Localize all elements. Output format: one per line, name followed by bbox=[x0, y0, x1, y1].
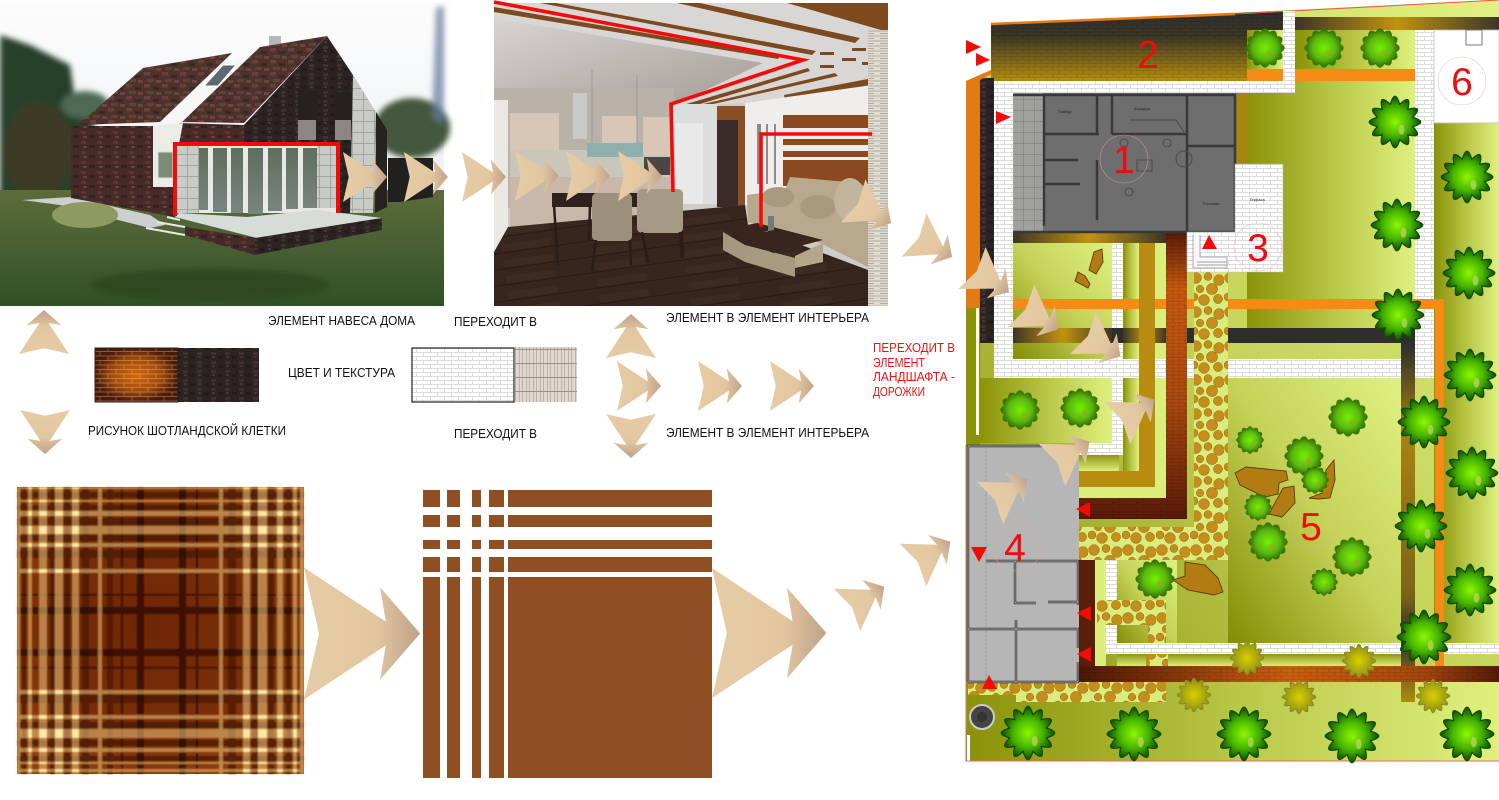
swatch: dark brick bbox=[178, 348, 259, 402]
pebble paths bbox=[968, 272, 1228, 702]
swatch: orange brick bbox=[95, 348, 178, 402]
zone numbers: 6 bbox=[1451, 61, 1473, 104]
large arrow: tartan to simplified stripes bbox=[304, 568, 420, 700]
path and shrub bbox=[22, 197, 165, 228]
white volume and window bbox=[153, 123, 183, 187]
trees behind the house bbox=[0, 6, 450, 260]
white paving paths bbox=[994, 11, 1499, 654]
red label: becomes landscape paths: ЛАНДШАФТА - bbox=[873, 369, 955, 384]
legend down arrow bbox=[20, 410, 70, 454]
timber beams bbox=[494, 3, 888, 107]
label: tartan pattern: РИСУНОК ШОТЛАНДСКОЙ КЛЕТКИ bbox=[88, 423, 286, 438]
ceiling bbox=[494, 18, 763, 104]
label: transforms into, top: ПЕРЕХОДИТ В bbox=[454, 314, 537, 329]
zone numbers: 3 bbox=[1247, 227, 1269, 270]
room labels: Гостиная bbox=[1203, 201, 1219, 206]
kitchen wall bbox=[494, 88, 674, 208]
dark red strip beside outbuilding bbox=[1079, 560, 1095, 666]
swatch: pale stone bbox=[515, 347, 577, 402]
dining table and chairs bbox=[552, 189, 683, 270]
outbuilding 4 bbox=[968, 445, 1079, 682]
dormer strip and skylight bbox=[160, 50, 253, 122]
well bbox=[970, 705, 994, 729]
label: transforms into, bottom: ПЕРЕХОДИТ В bbox=[454, 426, 537, 441]
zone rings bbox=[993, 57, 1486, 571]
red canopy outline bbox=[175, 144, 338, 216]
house floor plan 1 bbox=[1013, 93, 1235, 232]
right roof and chimney bbox=[269, 36, 281, 46]
photo: living room interior bbox=[494, 2, 888, 306]
legend up arrow bbox=[19, 310, 69, 354]
room labels: Тамбур bbox=[1058, 109, 1073, 114]
sofa bbox=[747, 177, 868, 267]
red label: becomes landscape paths: ПЕРЕХОДИТ В bbox=[873, 340, 955, 355]
room labels: Коридор bbox=[1134, 106, 1151, 111]
lawn bbox=[0, 190, 444, 306]
red label: becomes landscape paths: ДОРОЖКИ bbox=[873, 384, 925, 399]
doors and brown panel bbox=[673, 104, 745, 207]
brick walls bbox=[71, 126, 175, 217]
soffit bbox=[494, 3, 888, 106]
floor bbox=[494, 205, 868, 306]
red brick path L bbox=[1079, 232, 1187, 519]
red element outlines bbox=[494, 2, 872, 227]
top gold strip bbox=[1295, 17, 1499, 30]
left roof bbox=[78, 53, 232, 125]
small arrows leading to the plan bbox=[834, 520, 964, 631]
site plan bbox=[958, 0, 1499, 763]
tartan pattern square bbox=[17, 487, 304, 774]
zone numbers: 5 bbox=[1300, 506, 1322, 549]
terrace 3 bbox=[1187, 164, 1283, 272]
small trees bbox=[1001, 29, 1399, 598]
parking area 2: dark paving bbox=[991, 0, 1499, 81]
pale side wall bbox=[350, 75, 376, 213]
red label: becomes landscape paths: ЭЛЕМЕНТ bbox=[873, 355, 925, 370]
label: interior element, top: ЭЛЕМЕНТ В ЭЛЕМЕНТ ИНТЕРЬЕРА bbox=[666, 310, 869, 325]
simplified stripe pattern bbox=[423, 490, 712, 778]
large arrow: stripes to plan bbox=[712, 568, 826, 698]
label: canopy element: ЭЛЕМЕНТ НАВЕСА ДОМА bbox=[268, 313, 415, 328]
swatch: white brick bbox=[412, 348, 514, 402]
left dark and orange borders bbox=[966, 70, 994, 445]
lawn base bbox=[966, 0, 1499, 761]
arrows over the plan bbox=[958, 247, 1168, 524]
white zone 6 bbox=[1434, 30, 1499, 123]
gold strip beside house bbox=[1235, 93, 1247, 164]
zone numbers: 4 bbox=[1004, 527, 1026, 570]
garden rocks bbox=[1075, 249, 1335, 595]
bottom brick road bbox=[1079, 666, 1499, 682]
lawn pocket with tree beside parking bbox=[1247, 30, 1283, 69]
orange path, top bbox=[1247, 69, 1415, 81]
outbuilding bbox=[388, 158, 433, 202]
terrace 3: Терраса bbox=[1249, 197, 1265, 202]
gold strip under house bbox=[1013, 232, 1166, 243]
plan outline bbox=[966, 445, 1499, 761]
horizontal dark and orange paths bbox=[1013, 299, 1444, 702]
label: interior element, bottom: ЭЛЕМЕНТ В ЭЛЕМЕНТ ИНТЕРЬЕРА bbox=[666, 425, 869, 440]
stone column bbox=[868, 30, 888, 306]
room labels bbox=[1058, 106, 1219, 206]
glazed terrace wall bbox=[177, 146, 338, 214]
label: colour and texture: ЦВЕТ И ТЕКСТУРА bbox=[288, 365, 395, 380]
entrance markers bbox=[966, 40, 1217, 689]
large trees bbox=[1001, 96, 1498, 763]
row of arrows over the photos bbox=[343, 151, 965, 279]
white partition with stripes bbox=[745, 85, 872, 205]
yellow shrubs bbox=[1177, 641, 1450, 714]
kitchen units bbox=[494, 70, 674, 253]
zone numbers: 1 bbox=[1113, 139, 1135, 182]
zone numbers: 2 bbox=[1137, 34, 1159, 77]
photo: house exterior bbox=[0, 3, 450, 306]
terrace deck bbox=[175, 210, 382, 238]
coffee table bbox=[723, 216, 823, 277]
zone numbers bbox=[1004, 34, 1473, 570]
dark gable bbox=[244, 36, 353, 213]
central arrows bbox=[606, 314, 814, 458]
gold path L bbox=[1079, 243, 1155, 487]
white corner post bbox=[967, 735, 970, 761]
